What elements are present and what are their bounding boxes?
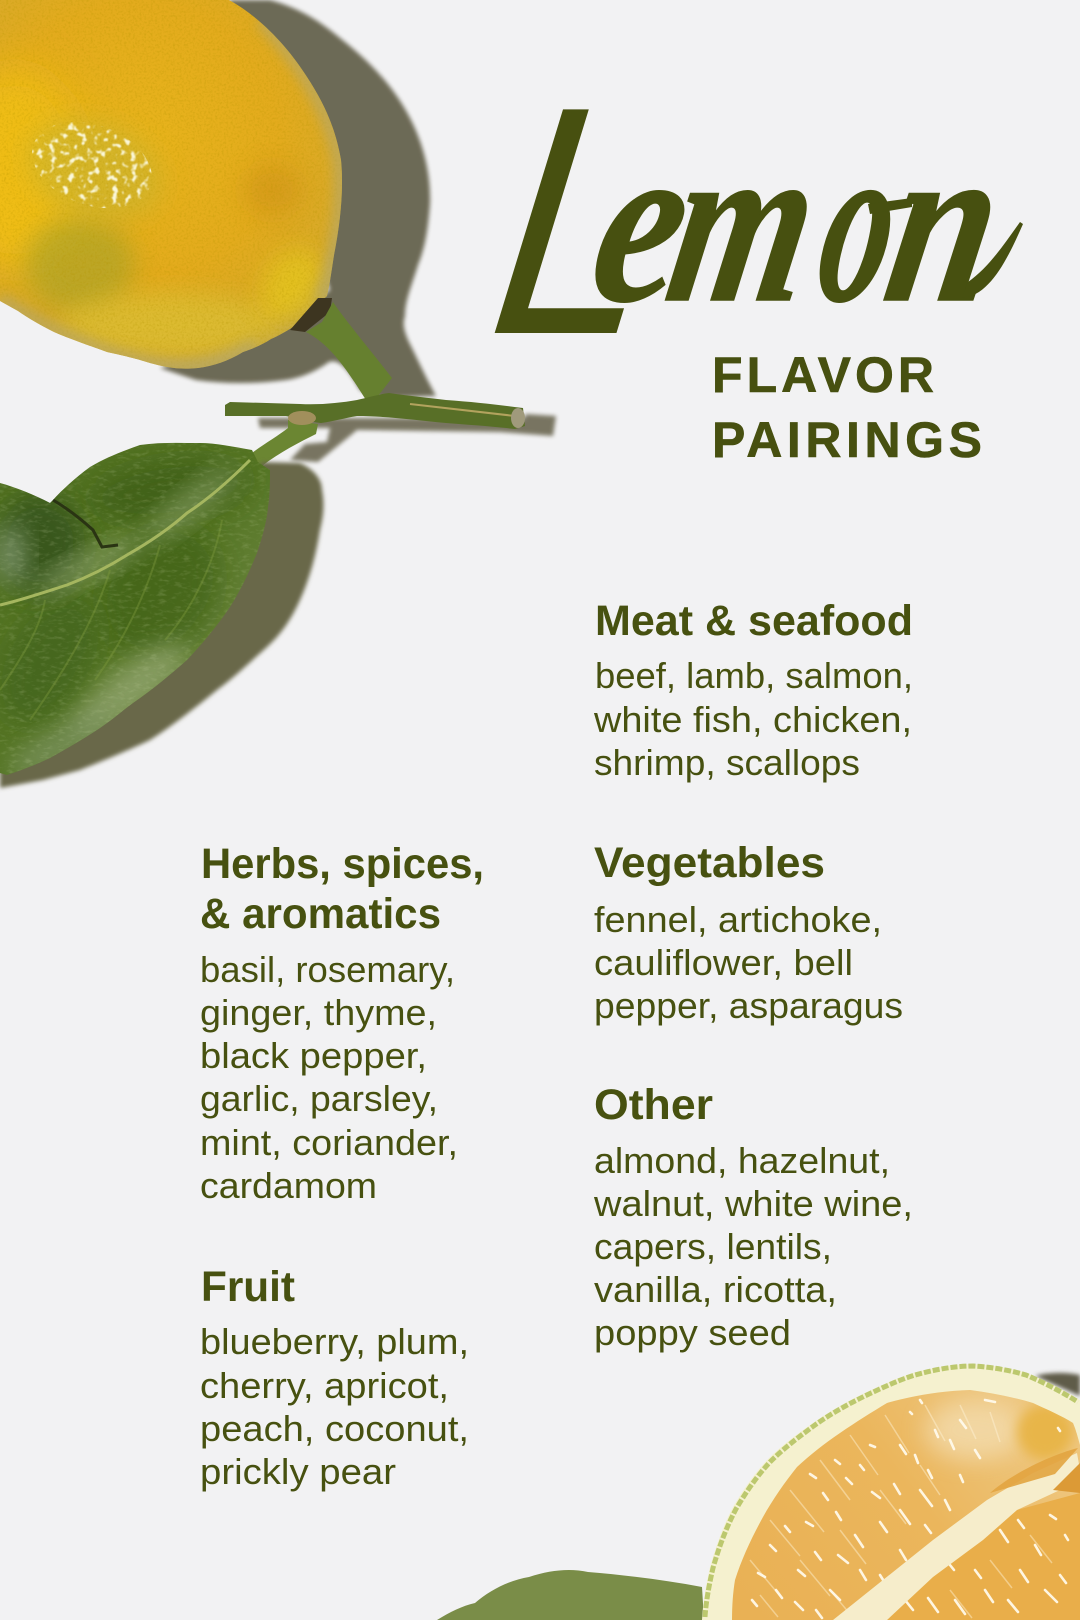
brush swash on final letter — [962, 222, 1023, 298]
list: other: capers, lentils, — [594, 1226, 832, 1267]
node on branch — [288, 411, 316, 425]
list: fruit: cherry, apricot, — [200, 1365, 449, 1406]
leaf blade — [0, 440, 280, 791]
lemon rough edge — [0, 20, 342, 367]
panel: other — [593, 1081, 913, 1353]
photo: lemon slice at bottom right — [437, 1364, 1080, 1620]
photo: upper leaf with shadow — [0, 440, 323, 791]
list: fruit: peach, coconut, — [200, 1408, 469, 1449]
subtitle: flavor pairings: PAIRINGS — [712, 412, 982, 468]
list: herbs, spices and aromatics: garlic, parsley, — [200, 1078, 438, 1119]
list: meat and seafood: shrimp, scallops — [594, 742, 860, 783]
pith — [702, 1364, 1080, 1620]
panel: fruit — [200, 1263, 469, 1492]
branch end cut — [511, 408, 525, 428]
heading: fruit: Fruit — [201, 1263, 295, 1311]
heading: herbs, spices and aromatics — [200, 840, 484, 938]
title: Lemon — [451, 39, 1023, 402]
branch — [225, 393, 525, 429]
juice highlights — [752, 1400, 1068, 1618]
leaf midrib — [0, 460, 250, 605]
list: herbs, spices and aromatics: black pepper, — [200, 1035, 427, 1076]
list: fruit: prickly pear — [200, 1451, 396, 1492]
branch shadow — [258, 414, 556, 462]
leaf veins — [0, 520, 222, 720]
heading: meat and seafood: Meat & seafood — [595, 597, 913, 645]
photo: whole lemon with stem — [0, 0, 436, 400]
title: Lemon: n — [871, 93, 1020, 350]
list: herbs, spices and aromatics: mint, coriander, — [200, 1122, 458, 1163]
bottom leaf — [437, 1570, 704, 1620]
title: Lemon: e — [577, 93, 709, 350]
lemon body — [0, 0, 350, 372]
leaf fold — [53, 500, 118, 547]
list: other: walnut, white wine, — [593, 1183, 913, 1224]
lemon shadow — [160, 0, 436, 398]
list: herbs, spices and aromatics: ginger, thyme, — [200, 992, 437, 1033]
list: meat and seafood: beef, lamb, salmon, — [595, 655, 913, 696]
list: vegetables — [594, 899, 903, 1026]
stem joint — [290, 298, 332, 332]
list: other: almond, hazelnut, — [594, 1140, 890, 1181]
subtitle: flavor pairings: FLAVOR — [712, 347, 934, 403]
list: vegetables: cauliflower, bell — [594, 942, 853, 983]
highlight dimples — [32, 122, 152, 208]
heading: other: Other — [594, 1081, 713, 1129]
heading: herbs, spices and aromatics: Herbs, spices, — [201, 840, 484, 888]
list: herbs, spices and aromatics — [200, 949, 458, 1206]
rind edge — [705, 1366, 1078, 1617]
list: vegetables: pepper, asparagus — [594, 985, 903, 1026]
leaf shadow — [0, 462, 323, 788]
list: other: poppy seed — [594, 1312, 791, 1353]
membrane — [833, 1453, 1080, 1620]
slice shadow — [1035, 1373, 1080, 1396]
list: fruit: blueberry, plum, — [200, 1321, 469, 1362]
heading: vegetables: Vegetables — [594, 839, 825, 887]
list: herbs, spices and aromatics: cardamom — [200, 1165, 377, 1206]
panel: vegetables — [594, 839, 903, 1026]
panel: herbs, spices and aromatics — [200, 840, 484, 1206]
brush connector between letters — [868, 198, 912, 214]
heading: herbs, spices and aromatics: & aromatics — [200, 890, 441, 938]
flesh — [725, 1385, 1080, 1620]
subtitle: flavor pairings — [712, 347, 982, 468]
leaf stalk — [248, 420, 318, 466]
stem — [306, 302, 392, 400]
list: vegetables: fennel, artichoke, — [594, 899, 882, 940]
list: meat and seafood — [593, 655, 913, 783]
list: other: vanilla, ricotta, — [594, 1269, 837, 1310]
fine fibres — [750, 1405, 1052, 1618]
title: Lemon: m — [653, 95, 835, 351]
photo: branch with shadow — [225, 393, 556, 466]
title: Lemon: L — [451, 39, 715, 402]
list: herbs, spices and aromatics: basil, rosemary, — [200, 949, 455, 990]
title: Lemon: o — [803, 94, 918, 350]
list: fruit — [200, 1321, 469, 1492]
list: other — [593, 1140, 913, 1353]
list: meat and seafood: white fish, chicken, — [593, 699, 912, 740]
panel: meat and seafood — [593, 597, 913, 783]
